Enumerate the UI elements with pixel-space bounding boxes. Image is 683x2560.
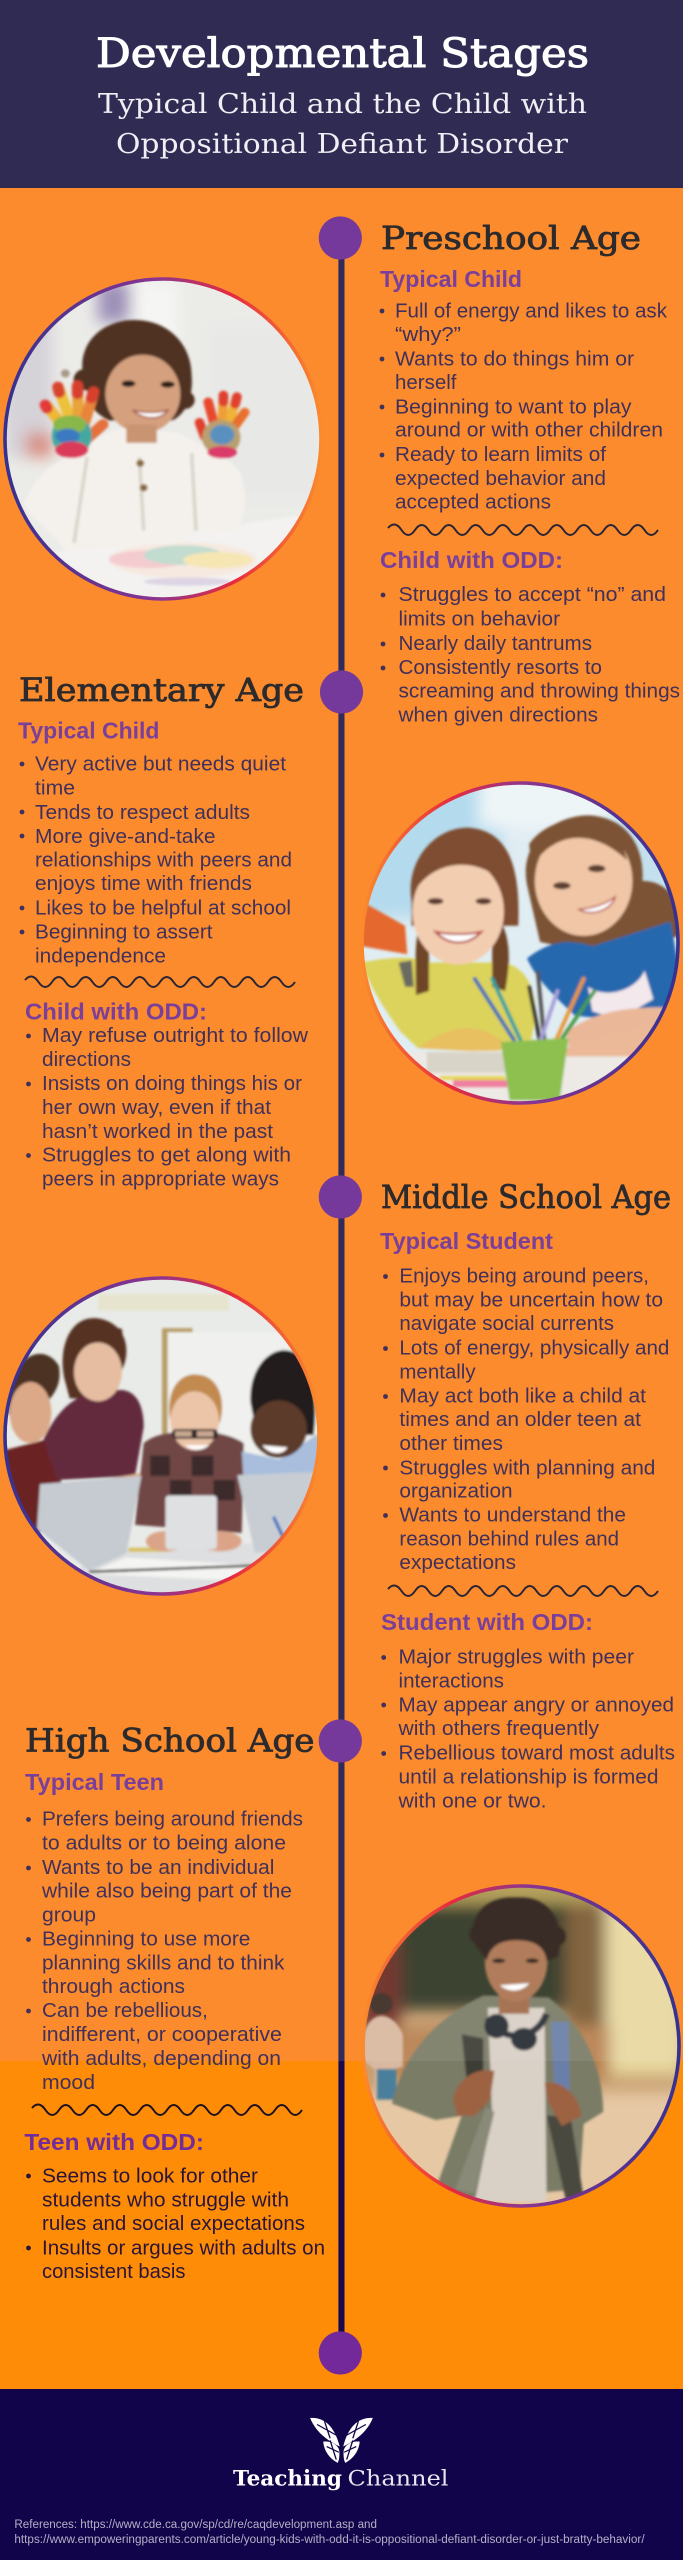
list: child with ODD traits: Insists on doing things his or [42, 1073, 302, 1095]
list: child with ODD traits: Nearly daily tantrums [398, 633, 592, 655]
list: typical student traits: navigate social currents [399, 1313, 614, 1335]
timeline node: elementary [320, 670, 363, 714]
subheading: typical teen: Typical Teen [25, 1769, 164, 1795]
list: typical child traits: Likes to be helpful at school [35, 897, 291, 919]
list: typical student traits: May act both like a child at [399, 1385, 646, 1407]
list: typical child traits: More give-and-take [35, 826, 216, 848]
list: child with ODD traits: directions [42, 1049, 131, 1071]
neck and head [497, 1994, 531, 2016]
list: child with ODD traits: Struggles to get along with [42, 1145, 291, 1167]
list: typical child traits: Tends to respect adults [35, 802, 250, 824]
list: typical teen traits: Wants to be an individual [42, 1857, 274, 1879]
right girl [250, 1350, 315, 1435]
list: typical student traits: expectations [399, 1552, 516, 1574]
list: typical child traits: Beginning to want to play [395, 396, 632, 418]
panel: high school age [24, 1721, 325, 2283]
shirt [24, 429, 245, 551]
subheading: child with ODD: Child with ODD: [25, 999, 207, 1025]
list: teen with ODD traits: consistent basis [42, 2261, 186, 2283]
photo: students with laptops [0, 1276, 331, 1602]
center girl [135, 1431, 244, 1533]
logo wordmark [233, 2465, 449, 2490]
list: child with ODD traits: peers in appropriate ways [42, 1169, 279, 1191]
boy left [0, 1439, 70, 1533]
list: typical teen traits: indifferent, or cooperative [42, 2024, 282, 2046]
panel: elementary age [18, 671, 309, 1191]
list: child with ODD traits: May refuse outright to follow [42, 1025, 309, 1047]
photo: high school student with backpack [355, 1879, 683, 2214]
list: child with ODD traits: her own way, even if that [42, 1097, 271, 1119]
timeline node: middle school [319, 1175, 362, 1219]
subheading: typical child: Typical Child [380, 266, 522, 292]
list: typical child traits: “why?” [395, 324, 461, 346]
list: child with ODD traits: when given directions [397, 705, 598, 727]
subtitle [98, 89, 587, 160]
list: student with ODD traits: Rebellious toward most adults [398, 1743, 675, 1765]
panel: middle school age [380, 1178, 675, 1812]
list: typical teen traits: Prefers being around friends [42, 1809, 303, 1831]
pencils [475, 973, 595, 1042]
photo: two smiling girls with pencils [357, 775, 683, 1109]
list: typical child traits [20, 754, 292, 967]
list: child with ODD traits [26, 1025, 309, 1191]
list: student with ODD traits [381, 1647, 675, 1812]
left hand [45, 386, 103, 441]
list: teen with ODD traits [26, 2165, 325, 2283]
list: typical teen traits: through actions [42, 1976, 185, 1998]
list: student with ODD traits: May appear angry or annoyed [398, 1694, 674, 1716]
list: typical teen traits: while also being part of the [41, 1881, 292, 1903]
table [57, 518, 298, 597]
subheading: typical student: Typical Student [380, 1228, 553, 1254]
title: Developmental Stages [96, 31, 589, 77]
heading: Middle School Age [381, 1178, 671, 1216]
list: typical teen traits: to adults or to being alone [42, 1832, 286, 1854]
list: typical child traits: time [35, 777, 75, 799]
photo ring [363, 1886, 679, 2206]
heading: High School Age [25, 1721, 314, 1759]
list: child with ODD traits [381, 584, 680, 727]
lighter tint above band [366, 1888, 610, 2061]
list: student with ODD traits: until a relationship is formed [398, 1766, 658, 1788]
list: student with ODD traits: with one or two. [397, 1790, 546, 1812]
list: typical child traits: Very active but needs quiet [35, 754, 286, 776]
face [105, 355, 180, 433]
list: typical teen traits: Beginning to use more [42, 1929, 250, 1951]
references: https://www.empoweringparents.com/article/young-kids-with-odd-it-is-oppositional-defiant-disorder-or-just-bratty-behavior/ [14, 2534, 645, 2546]
teacher [63, 1318, 126, 1398]
list: typical child traits [380, 300, 668, 514]
subheading: child with ODD: Child with ODD: [380, 547, 563, 573]
heading: Elementary Age [19, 671, 304, 709]
list: teen with ODD traits: Seems to look for other [42, 2165, 258, 2187]
list: teen with ODD traits: students who struggle with [42, 2190, 289, 2212]
list: typical child traits: enjoys time with friends [35, 873, 252, 895]
list: child with ODD traits: Struggles to accept “no” and [398, 584, 666, 606]
list: typical student traits: Lots of energy, physically and [399, 1338, 669, 1360]
list: typical teen traits: group [42, 1904, 96, 1926]
list: teen with ODD traits: rules and social expectations [42, 2213, 305, 2235]
list: typical child traits: relationships with peers and [35, 850, 292, 872]
hair [82, 320, 192, 420]
jacket [392, 1996, 603, 2202]
list: student with ODD traits: with others frequently [397, 1718, 599, 1740]
list: typical teen traits: with adults, depending on [41, 2048, 281, 2070]
logo wordmark: Channel [348, 2466, 449, 2490]
list: typical child traits: Wants to do things him or [395, 348, 634, 370]
references [14, 2519, 645, 2546]
table [408, 1048, 628, 1101]
subtitle: Oppositional Defiant Disorder [116, 129, 568, 160]
list: typical child traits: around or with other children [395, 420, 663, 442]
list: typical child traits: herself [395, 372, 457, 394]
list: typical student traits: but may be uncertain how to [399, 1290, 663, 1312]
lower orange band [0, 2061, 683, 2389]
list: typical child traits: accepted actions [395, 492, 551, 514]
subheading: student with ODD: Student with ODD: [381, 1609, 593, 1635]
list: typical student traits: Enjoys being around peers, [399, 1266, 649, 1288]
timeline node: preschool [319, 216, 362, 260]
timeline line [338, 238, 344, 2353]
list: typical teen traits: mood [42, 2072, 95, 2094]
hands [453, 2070, 494, 2116]
list: typical student traits: reason behind rules and [399, 1529, 619, 1551]
list: typical student traits: organization [399, 1481, 513, 1503]
list: typical student traits [383, 1266, 669, 1574]
cup [501, 1038, 568, 1100]
list: child with ODD traits: screaming and throwing things [398, 680, 680, 702]
photo: preschool girl with painted hands [0, 273, 331, 608]
list: typical child traits: Beginning to assert [35, 921, 213, 943]
list: typical teen traits: Can be rebellious, [42, 2000, 208, 2022]
list: typical student traits: mentally [399, 1361, 476, 1383]
heading: Preschool Age [381, 219, 641, 257]
subheading: teen with ODD: Teen with ODD: [24, 2129, 204, 2155]
photo ring [362, 783, 678, 1103]
right hand [199, 395, 245, 437]
header banner [0, 0, 683, 188]
left girl [361, 958, 536, 1048]
list: typical student traits: other times [399, 1433, 503, 1455]
list: typical child traits: Ready to learn limits of [395, 444, 606, 466]
list: child with ODD traits: limits on behavior [398, 608, 560, 630]
icon: butterfly logo [310, 2418, 373, 2463]
whiteboard [162, 1328, 193, 1434]
timeline node: high school [319, 1719, 362, 1763]
list: student with ODD traits: interactions [398, 1670, 504, 1692]
laptops [37, 1476, 142, 1571]
list: typical student traits: Wants to understand the [399, 1505, 626, 1527]
logo wordmark: Teaching [233, 2465, 342, 2490]
list: typical child traits: independence [35, 945, 166, 967]
hands [146, 1531, 185, 1551]
list: typical student traits: Struggles with planning and [399, 1457, 655, 1479]
list: typical student traits: times and an older teen at [399, 1409, 641, 1431]
photo ring [5, 1278, 319, 1594]
list: teen with ODD traits: Insults or argues with adults on [42, 2237, 325, 2259]
panel: preschool age [380, 219, 680, 727]
timeline node: end [319, 2331, 362, 2375]
headphones [488, 2014, 547, 2036]
list: typical teen traits: planning skills and to think [42, 1952, 285, 1974]
photo ring [5, 279, 321, 599]
list: typical teen traits [26, 1809, 303, 2094]
subtitle: Typical Child and the Child with [98, 89, 587, 120]
subheading: typical child: Typical Child [18, 717, 160, 743]
list: student with ODD traits: Major struggles with peer [398, 1647, 634, 1669]
list: typical child traits: Full of energy and likes to ask [395, 300, 668, 322]
table [82, 1544, 265, 1592]
right girl [526, 815, 683, 958]
list: child with ODD traits: hasn’t worked in the past [42, 1121, 273, 1143]
list: typical child traits: expected behavior and [395, 468, 606, 490]
list: child with ODD traits: Consistently resorts to [398, 657, 602, 679]
background pupil [364, 2016, 403, 2100]
references: References: https://www.cde.ca.gov/sp/cd/re/caqdevelopment.asp and [14, 2519, 377, 2531]
footer [0, 2389, 683, 2560]
